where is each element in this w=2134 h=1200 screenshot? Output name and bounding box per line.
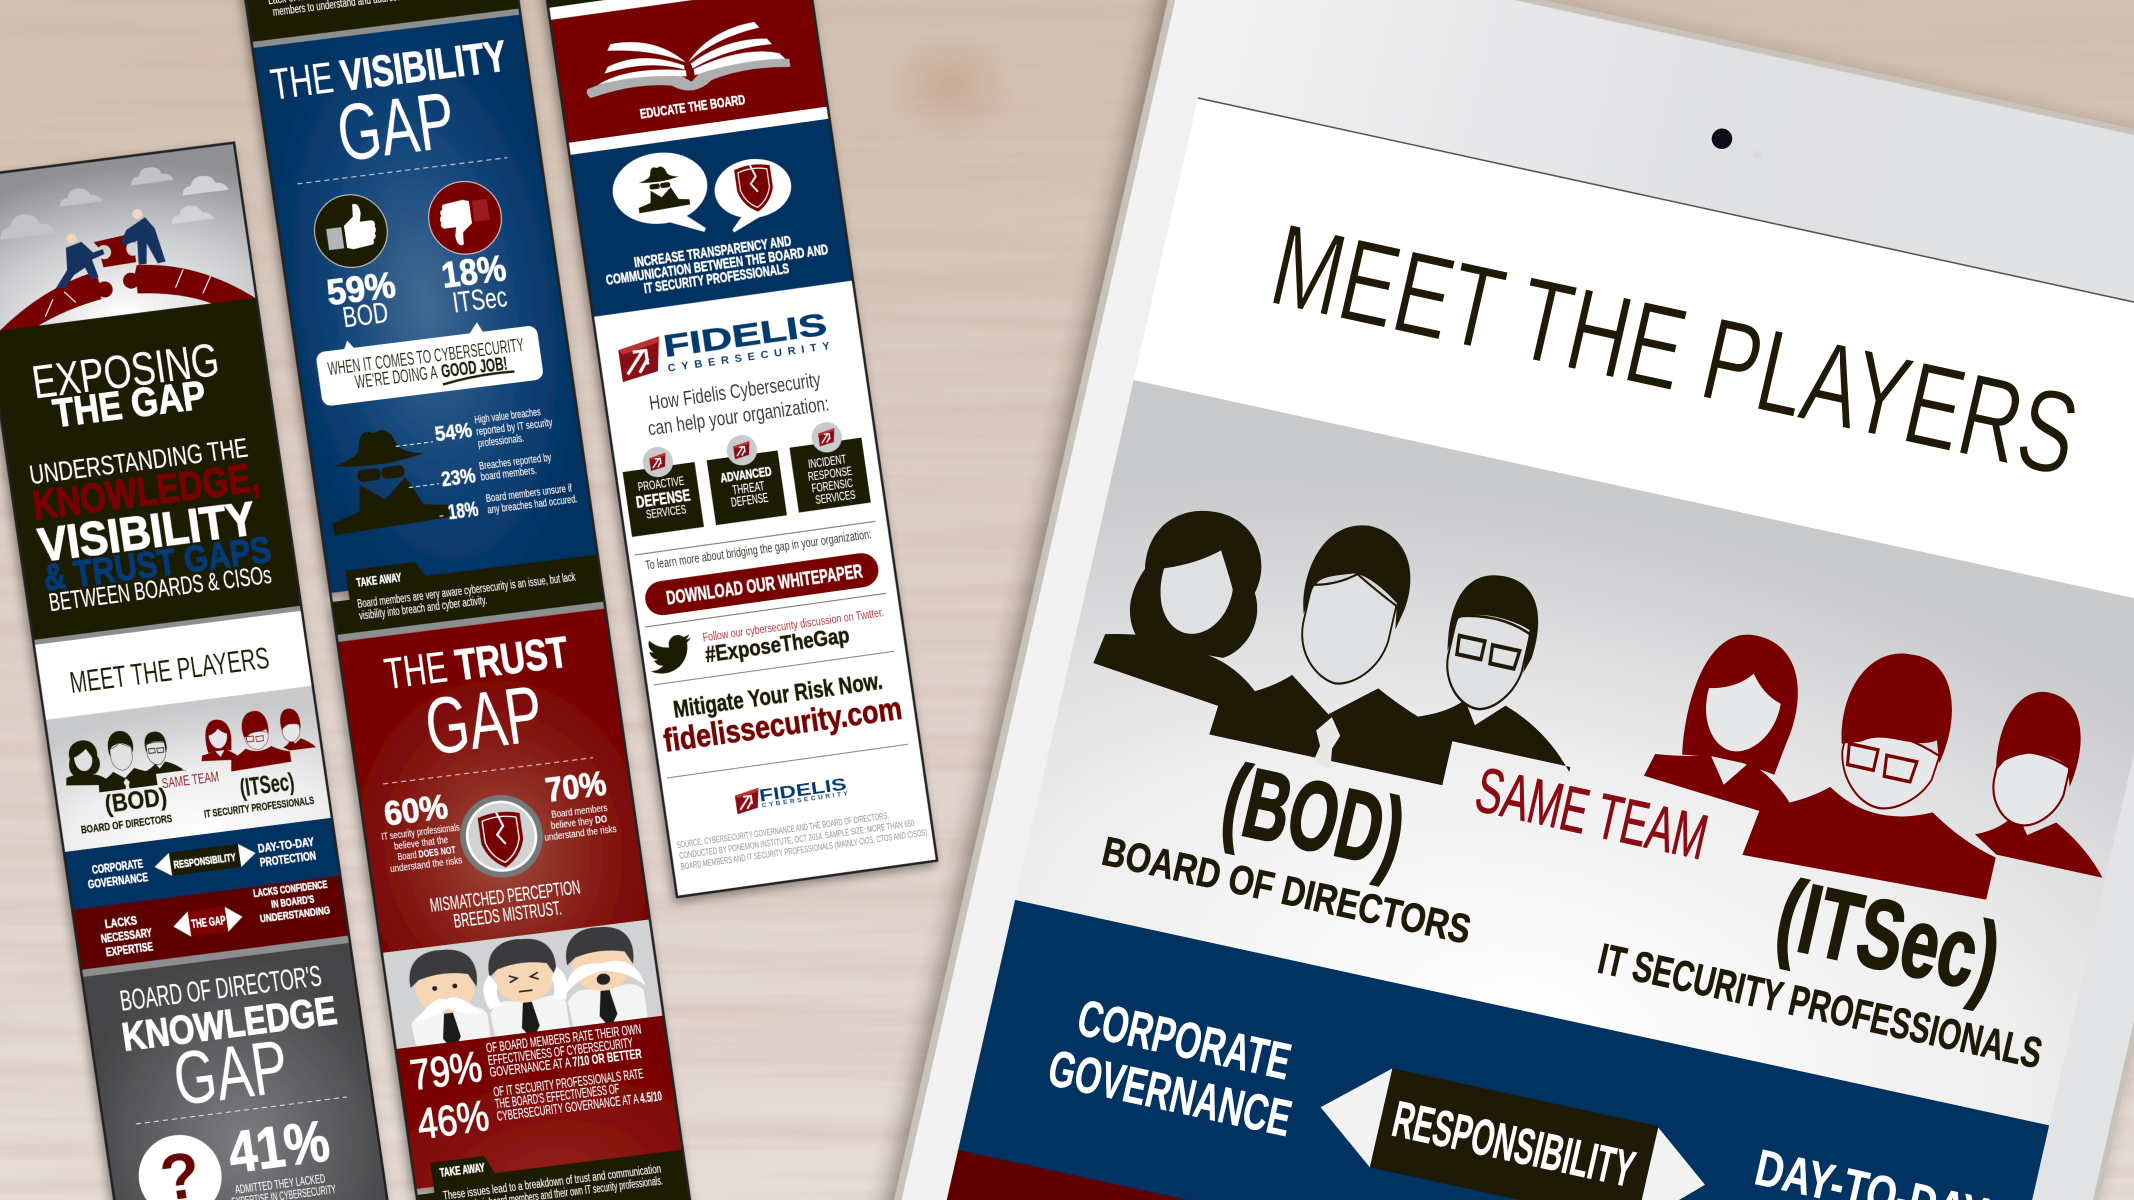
players panel: BOARD OF DIRECTORS [80,813,173,836]
screen: heading [1132,98,2134,613]
speech bubble: WHEN IT COMES TO CYBERSECURITY [326,335,525,379]
breach stats: Board members unsure if [485,483,573,505]
strip: top of infographic (exposing the gap, players, knowledge gap) [0,143,394,1200]
service box: proactive defense: DEFENSE [635,486,692,512]
screen: players [1015,380,2134,1127]
take away panel: visibility [328,540,605,642]
fidelis logo: CYBERSECURITY [667,340,831,375]
visibility heading: THE [268,54,336,109]
panel: educate the board: EDUCATE THE BOARD [639,91,746,121]
players panel: IT SECURITY PROFESSIONALS [203,795,315,821]
whitepaper button [639,526,881,617]
source note [676,805,930,872]
stat: 60%: 60% [382,788,450,833]
meet the players heading panel [33,606,313,721]
responsibility band [64,818,340,911]
title text: EXPOSING [29,333,222,408]
trust heading: GAP [420,669,548,771]
sky panel [0,143,257,333]
screen: players: (BOD) [1213,743,1415,889]
icon: thumbs down [424,177,506,258]
mitigate call to action: Mitigate Your Risk Now. [672,668,884,724]
stat: 59% BOD: BOD [341,296,390,334]
panel: trust stats [396,1016,684,1189]
responsibility band: CORPORATE [91,856,144,877]
previous section takeaway [239,0,520,48]
panel: trust gap [337,608,650,954]
stat: 18% ITSec [439,247,512,320]
panel: educate the board [550,0,828,143]
panel: visibility gap [252,14,598,593]
service box: incident response: RESPONSE [807,464,853,484]
service box: proactive defense [620,442,704,537]
camera [1709,127,1765,160]
boy covering mouth [401,945,492,1056]
screen: responsibility band [958,900,2049,1200]
stat: 18% ITSec: 18% [439,247,509,296]
service box: incident response: FORENSIC [811,476,854,495]
visibility heading [268,32,520,185]
players panel: (ITSec) [238,768,296,803]
visibility heading: VISIBILITY [338,32,509,101]
title text [12,330,276,618]
visibility heading: GAP [332,75,460,178]
the gap band: UNDERSTANDING [259,905,331,926]
title text: THE GAP [50,373,209,436]
service box: advanced threat defense: THREAT [731,479,766,497]
take away panel: visibility: Board members are very aware cybersecurity is an issue, but lack [356,570,577,611]
screen: gap band [913,1150,1992,1200]
icon: open book [580,18,792,105]
service box: proactive defense: SERVICES [645,502,687,522]
small fidelis logo: FIDELIS [758,774,848,806]
panel: trust stats: OF BOARD MEMBERS RATE THEIR OWN [485,1021,642,1056]
icon: shield speech bubble [711,154,797,233]
service box: advanced threat defense [704,430,787,525]
stat: 60%: Board DOES NOT [397,845,457,863]
panel: trust stats: GOVERNANCE AT A 7/10 OR BETTER [488,1045,643,1080]
how fidelis helps: can help your organization: [647,394,831,441]
tablet showing meet the players [844,0,2134,1200]
puzzle arc [0,219,257,332]
service box: proactive defense: PROACTIVE [637,474,685,494]
speech bubble: WE'RE DOING A [354,362,439,392]
screen: players: BOARD OF DIRECTORS [1098,828,1475,953]
players panel: (BOD) [103,783,169,819]
knowledge gap panel [81,936,394,1200]
icon: thumbs up [310,191,392,272]
twitter hashtag: #ExposeTheGap [703,622,851,667]
stat: 18% ITSec: ITSec [451,280,509,319]
speech bubble [314,315,544,407]
the gap band [72,876,349,970]
service box: advanced threat defense: DEFENSE [730,491,769,510]
stat: 60%: believe that the [393,835,449,853]
panel: increase transparency [569,119,853,317]
breach stats: any breaches had occured. [487,493,578,516]
service box: advanced threat defense: ADVANCED [719,464,772,486]
knowledge gap panel: KNOWLEDGE [119,989,340,1060]
boy covering eyes [556,922,651,1033]
panel: trust stats: OF IT SECURITY PROFESSIONALS RATE [492,1065,644,1100]
businessmen [46,206,168,289]
meet the players heading panel: MEET THE PLAYERS [68,642,271,700]
icon: twitter bird [646,633,695,675]
trust heading: TRUST [452,628,572,690]
how fidelis helps [643,369,831,441]
panel: increase transparency: IT SECURITY PROFESSIONALS [643,261,790,297]
the gap band: LACKS CONFIDENCE [252,879,328,900]
twitter hashtag: Follow our cybersecurity discussion on Twitter. [702,605,885,644]
the gap band: LACKS [104,914,138,931]
small fidelis logo [734,774,849,814]
take away panel: trust: TAKE AWAY [439,1161,486,1180]
service box: incident response: INCIDENT [807,452,848,471]
panel: trust stats: 79% [407,1043,485,1099]
stat: 70% [535,764,617,844]
stat: 41%: 41% [224,1108,333,1186]
title text: VISIBILITY [35,492,259,572]
title text: KNOWLEDGE, [30,454,262,528]
stat: 41%: ADMITTED THEY LACKED [234,1171,326,1197]
the gap band: EXPERTISE [105,941,154,960]
breach stats: professionals. [477,433,525,450]
mismatched perception caption [429,878,584,935]
panel: trust stats: 46% [414,1092,492,1148]
tablet body [844,0,2134,1200]
take away panel: visibility: TAKE AWAY [356,571,403,590]
mismatched perception caption: BREEDS MISTRUST. [452,898,563,933]
panel: trust stats: EFFECTIVENESS OF CYBERSECURITY [487,1034,634,1068]
stat: 60%: IT security professionals [381,822,460,843]
small fidelis logo: CYBERSECURITY [761,790,849,810]
panel: trust stats: CYBERSECURITY GOVERNANCE AT A 4.5/10 [496,1087,663,1124]
stat: 59% BOD: 59% [324,264,398,313]
take away panel: visibility: visibility into breach and cyber activity. [358,593,488,623]
whitepaper button: To learn more about bridging the gap in your organization: [644,526,872,573]
icon: spy speech bubble [608,147,714,242]
stat: 59% BOD [324,264,401,335]
mismatched perception caption: MISMATCHED PERCEPTION [429,878,582,917]
panel: increase transparency: INCREASE TRANSPARENCY AND [633,233,792,271]
panel: three wise businessmen [382,920,665,1058]
knowledge gap panel: GAP [168,1023,293,1121]
mitigate call to action [658,666,904,759]
stat: 60% [376,787,465,876]
source note: SOURCE: CYBERSECURITY GOVERNANCE AND THE BOARD OF DIRECTORS, [676,810,889,850]
fidelis logo [616,306,831,382]
players panel: SAME TEAM [161,768,220,792]
title text: & TRUST GAPS [40,528,273,598]
players panel [45,686,332,853]
take away panel: trust [412,1132,696,1200]
title panel [0,298,302,646]
the gap band: THE GAP [190,913,227,931]
breach stats: 54% [433,419,474,446]
icon: spy figure [320,423,450,536]
panel: trust stats: THE BOARD'S EFFECTIVENESS OF [494,1080,620,1112]
responsibility band: GOVERNANCE [87,870,149,892]
service box: incident response: SERVICES [814,488,856,507]
breach stats: reported by IT security [476,417,554,438]
stat: 70%: understand the risks [544,824,617,844]
icon: broken shield [455,790,548,882]
title text: UNDERSTANDING THE [27,432,250,490]
service box: incident response [787,418,871,513]
fidelis logo: FIDELIS [661,306,829,364]
knowledge gap panel: BOARD OF DIRECTOR'S [118,959,323,1017]
breach stats: board members. [480,465,538,483]
screen: responsibility band: GOVERNANCE [1043,1039,1297,1147]
how fidelis helps: How Fidelis Cybersecurity [648,369,823,415]
icon: question mark circle [133,1130,227,1200]
strip: recommendations and Fidelis call to action [544,0,937,897]
responsibility band: RESPONSIBILITY [173,852,237,871]
boy covering ears [477,934,574,1045]
stat: 70%: believe they DO [550,814,608,832]
source note: CONDUCTED BY PONEMON INSTITUTE, OCT 2014. SAMPLE SIZE: MORE THAN 650 [679,818,915,861]
panel: white footer [593,281,937,897]
title text: BETWEEN BOARDS & CISOs [47,561,273,617]
mitigate call to action: fidelissecurity.com [661,690,904,759]
stat: 70%: 70% [543,765,609,810]
screen: players: SAME TEAM [1469,754,1714,873]
the gap band: NECESSARY [100,926,153,946]
strip: visibility and trust gaps [239,0,696,1200]
source note: BOARD MEMBERS AND IT SECURITY PROFESSIONALS (MAINLY CIOS, CTOS AND CISOS). [680,827,930,872]
screen: players: (ITSec) [1767,858,2010,1013]
stat: 70%: Board members [551,803,608,821]
responsibility band: PROTECTION [259,848,317,870]
breach stats: 23% [440,464,477,491]
the gap band: IN BOARD'S [270,893,315,911]
speech bubble: GOOD JOB! [440,353,509,381]
breach stats [393,403,579,529]
breach stats: High value breaches [474,406,542,426]
trust heading [364,627,593,784]
breach stats: Breaches reported by [478,452,552,472]
breach stats: 18% [447,498,480,524]
trust heading: THE [381,643,450,699]
responsibility band: DAY-TO-DAY [257,834,315,856]
screen: responsibility band: CORPORATE [1072,989,1296,1090]
whitepaper button: DOWNLOAD OUR WHITEPAPER [665,561,864,609]
stat: 60%: understand the risks [390,856,463,875]
panel: increase transparency: COMMUNICATION BETWEEN THE BOARD AND [605,242,829,289]
